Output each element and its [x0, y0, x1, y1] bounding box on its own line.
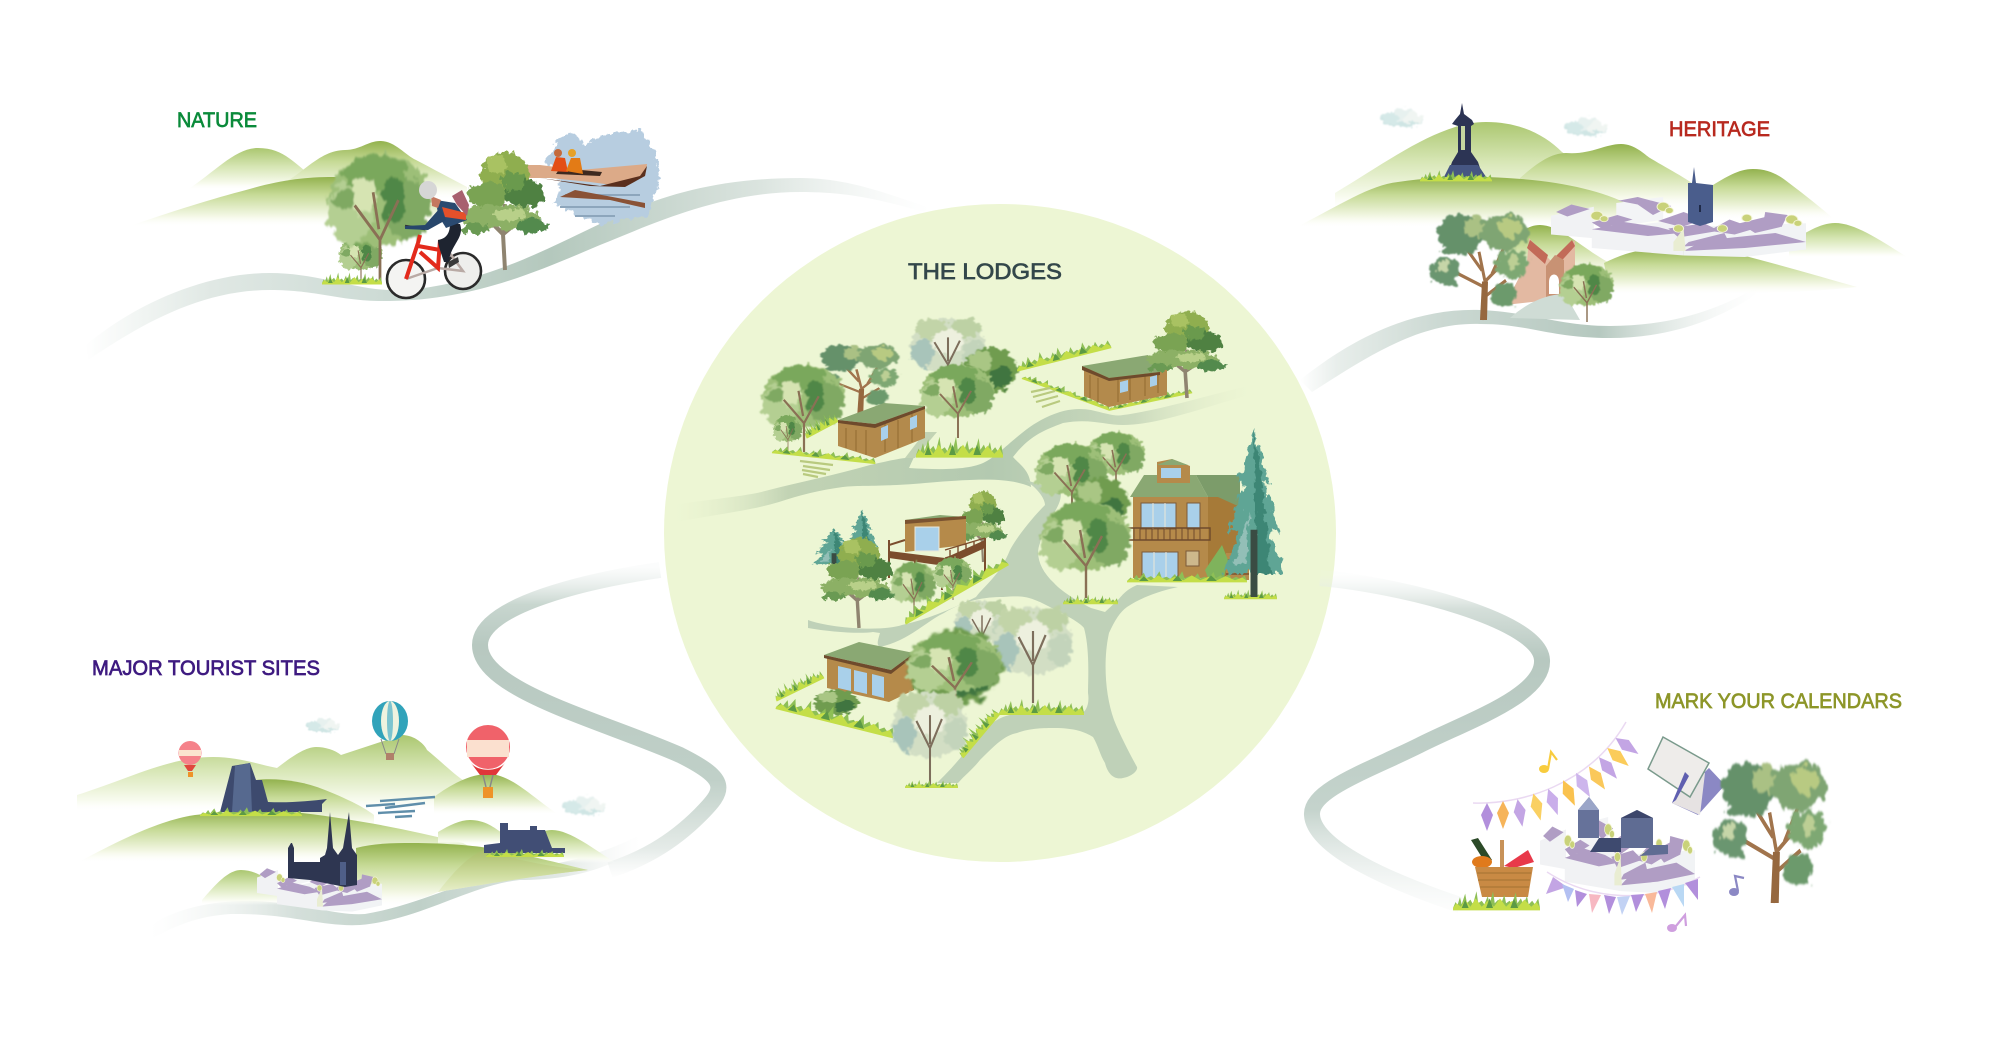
grass and bush by cabin 4 [771, 666, 897, 738]
grass: main house ground [1063, 571, 1277, 604]
cabin 4 [824, 642, 914, 702]
grass: treehouse slope [898, 552, 1009, 625]
picnic basket [1453, 838, 1540, 910]
circle background [664, 204, 1336, 862]
main house [1123, 459, 1249, 580]
oak tree [1429, 213, 1529, 320]
modern dark building [200, 763, 327, 816]
hot air balloon red [466, 725, 510, 798]
arched gate building [1505, 238, 1580, 320]
panel: the lodges circle [664, 204, 1336, 862]
panel: mark your calendars [1453, 690, 1902, 932]
big tree in front of main house [1040, 478, 1131, 598]
panel: nature [127, 109, 660, 298]
grass: first cabin ground [772, 409, 1003, 464]
heading: heritage: HERITAGE [1669, 118, 1770, 141]
hills [77, 735, 616, 907]
trees beside the main house [1035, 432, 1145, 516]
trees behind treehouse [813, 491, 1007, 570]
heading: major tourist sites: MAJOR TOURIST SITES [92, 657, 320, 680]
trees [322, 152, 549, 284]
village and cathedral [257, 812, 382, 912]
heading: nature: NATURE [177, 109, 257, 132]
music notes [1539, 752, 1744, 932]
tree near cabin 2 [1146, 312, 1227, 398]
trees behind first cabin [762, 317, 1017, 452]
road: circle to mark your calendars [1312, 578, 1542, 905]
village with tower [1551, 167, 1806, 257]
trees in front of treehouse [821, 538, 972, 628]
grass at monument [1420, 170, 1492, 181]
steps near cabin 2 [1031, 388, 1060, 407]
small tree [1559, 264, 1614, 322]
castle on hill [484, 823, 565, 857]
clouds [1381, 106, 1607, 136]
panel: heritage [1295, 103, 1907, 322]
water and boat [519, 130, 660, 225]
heading: mark your calendars: MARK YOUR CALENDARS [1655, 690, 1902, 713]
panel: major tourist sites [77, 657, 616, 912]
cabin 2 [1082, 355, 1167, 407]
inner roads [673, 386, 1250, 783]
treehouse cabin [889, 515, 985, 590]
bunting lower [1546, 872, 1700, 915]
monument tower [1444, 103, 1486, 177]
roads outside the circle [86, 178, 1760, 940]
steps near cabin 1 [800, 461, 833, 477]
clouds [307, 716, 605, 815]
cyclist on bicycle [387, 181, 481, 298]
open book and pen [1648, 737, 1725, 815]
heading: the lodges: THE LODGES [908, 259, 1062, 284]
hills [1295, 122, 1907, 295]
hot air balloon small [178, 741, 202, 777]
pale and dark trees, lower group [893, 600, 1084, 788]
hot air balloon teal [372, 701, 408, 760]
oak tree [1712, 761, 1827, 903]
bunting upper [1473, 722, 1642, 831]
grass: second cabin ground [1014, 335, 1192, 411]
water patch [366, 797, 435, 817]
fir tree by main house [1224, 429, 1284, 597]
hills [127, 141, 470, 227]
village with church towers [1540, 797, 1695, 893]
cabin 1 [838, 403, 925, 458]
